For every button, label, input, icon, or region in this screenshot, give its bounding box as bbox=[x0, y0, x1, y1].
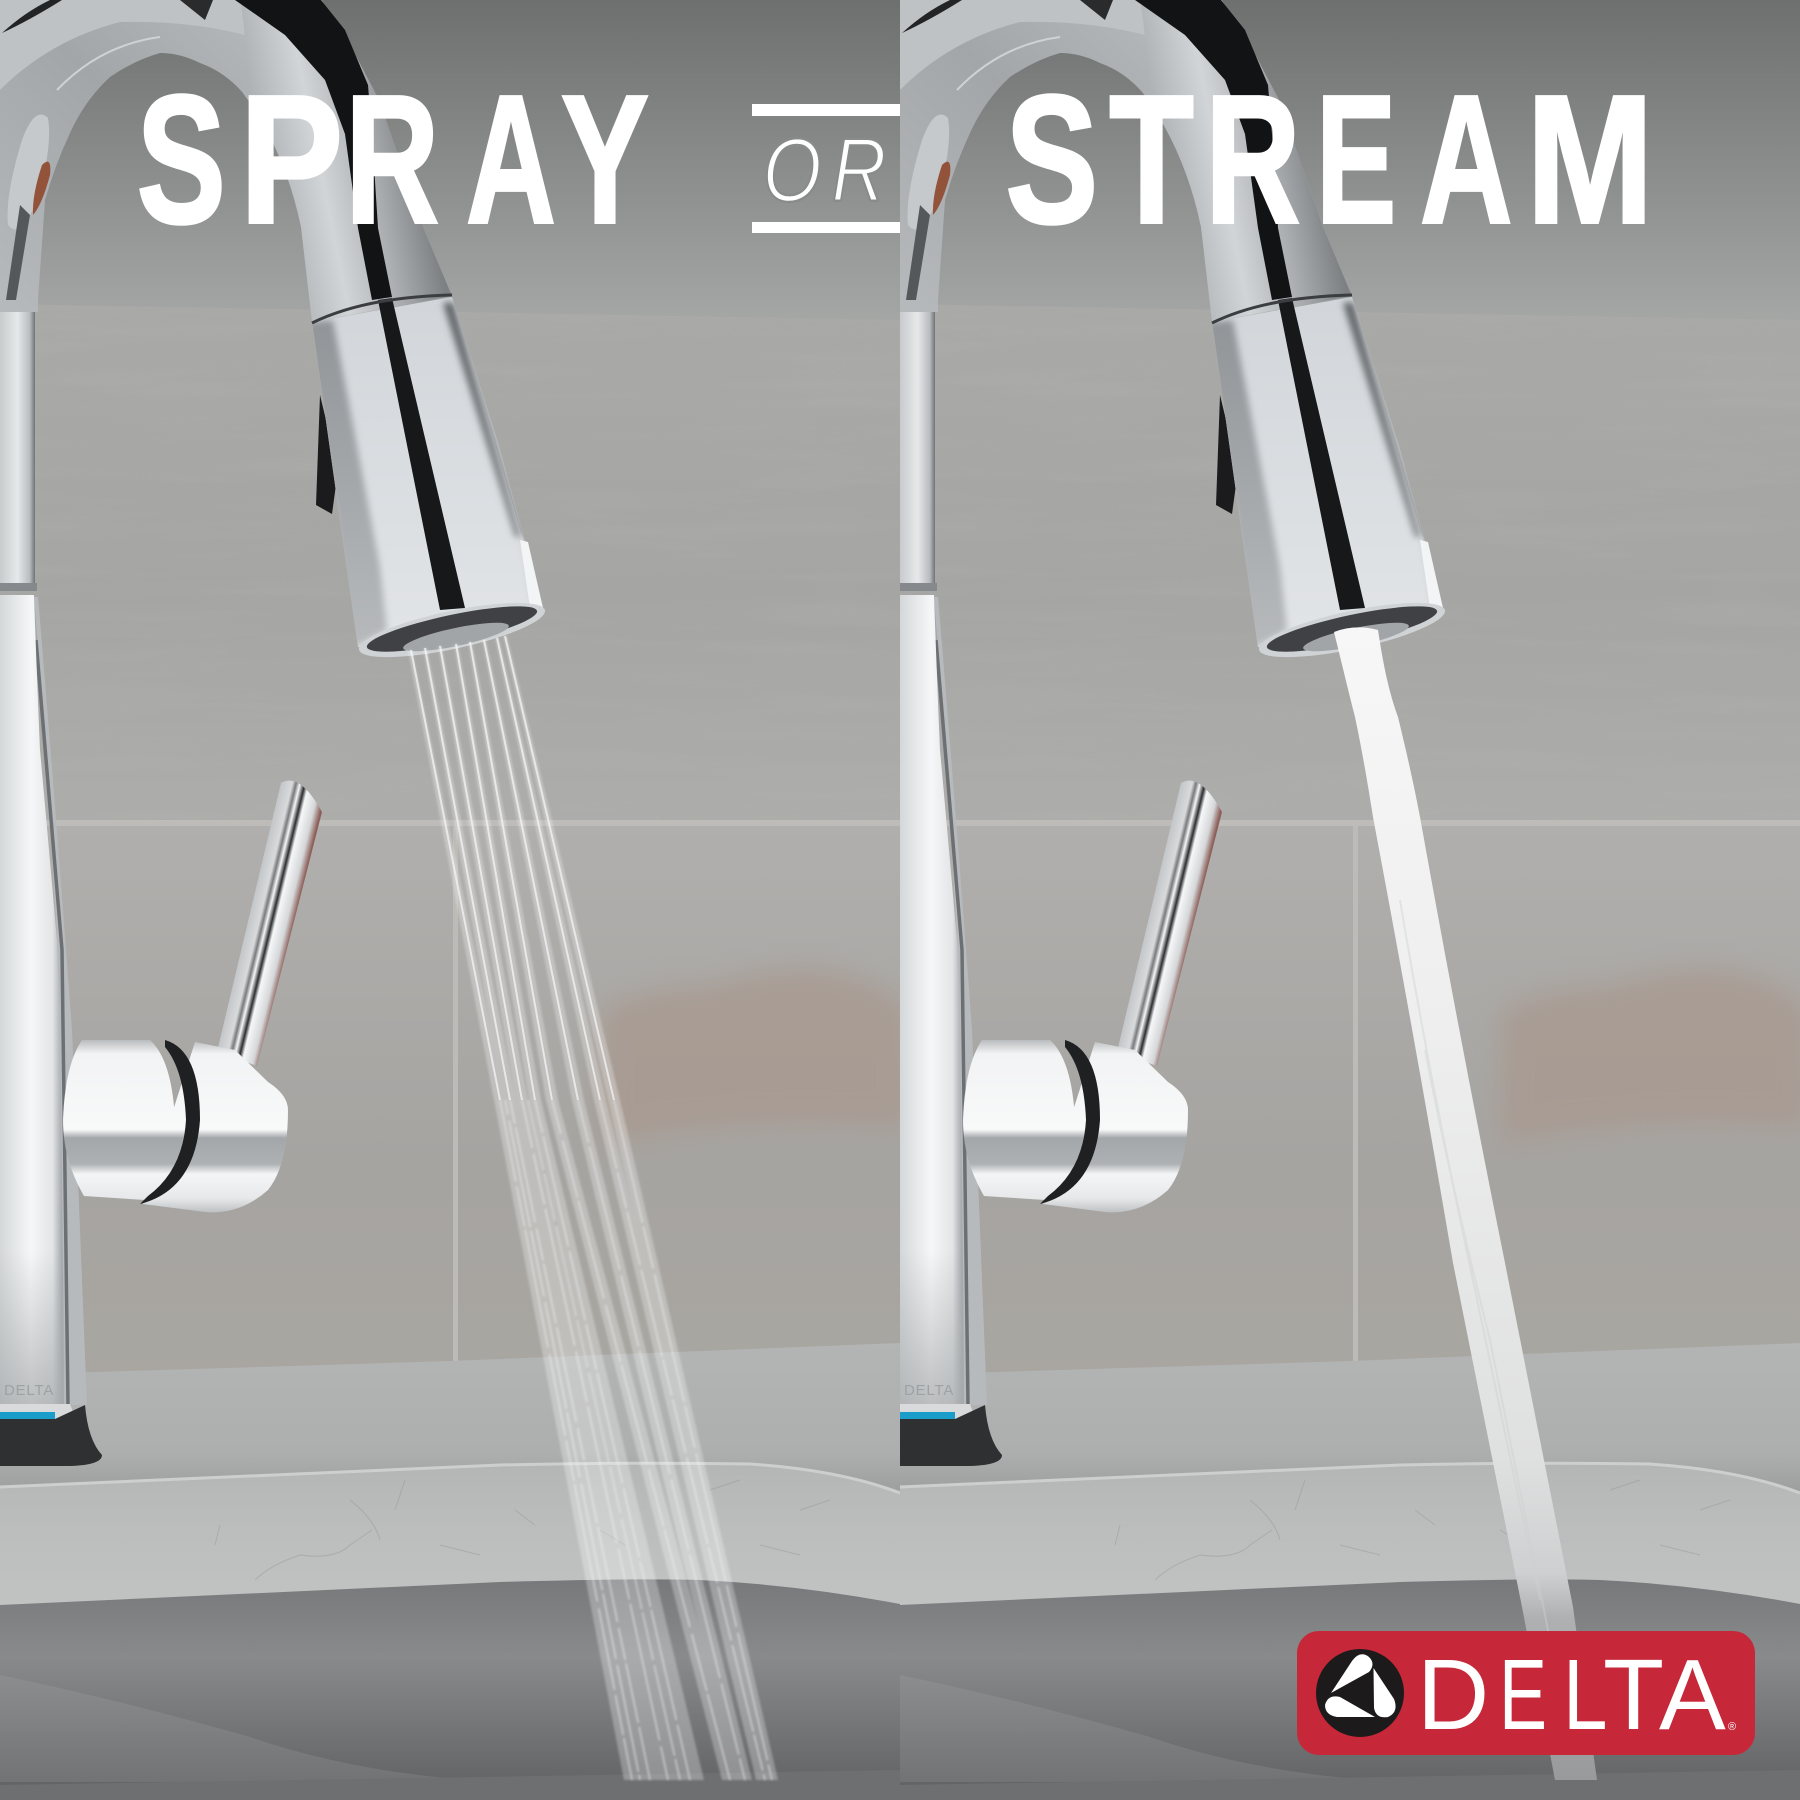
title: SPRAY: P bbox=[240, 57, 343, 261]
title: OR with rules: OR bbox=[763, 120, 886, 220]
title: STREAM: M bbox=[1526, 56, 1654, 262]
wordmark: DELTA: A bbox=[1659, 1639, 1726, 1751]
title: STREAM: E bbox=[1316, 57, 1396, 262]
wordmark: DELTA: L bbox=[1563, 1640, 1607, 1751]
wordmark: DELTA: T bbox=[1603, 1639, 1664, 1751]
water: solid stream bbox=[1334, 627, 1597, 1780]
title: SPRAY: S bbox=[137, 57, 226, 261]
wordmark: DELTA: ® bbox=[1728, 1721, 1736, 1733]
title: SPRAY: Y bbox=[561, 57, 649, 262]
title: SPRAY: R bbox=[345, 56, 439, 262]
title: STREAM bbox=[1005, 56, 1654, 262]
faucet: chrome pull-down kitchen faucet bbox=[900, 0, 1450, 1466]
faucet: chrome pull-down kitchen faucet bbox=[0, 0, 550, 1466]
title: SPRAY: A bbox=[466, 58, 556, 262]
title: SPRAY bbox=[137, 56, 649, 262]
background: kitchen wall and counter bbox=[0, 0, 910, 1800]
water: spray pattern bbox=[408, 636, 778, 1780]
title: STREAM: S bbox=[1005, 58, 1098, 262]
wordmark: DELTA: E bbox=[1499, 1639, 1547, 1751]
title: STREAM: R bbox=[1205, 57, 1300, 262]
title: OR with rules bbox=[752, 104, 900, 233]
panel: stream bbox=[900, 0, 1800, 1800]
title: STREAM: A bbox=[1420, 58, 1513, 262]
icon: Delta triangle mark bbox=[1316, 1649, 1404, 1737]
wordmark: DELTA bbox=[1417, 1639, 1736, 1751]
logo: Delta badge bbox=[1297, 1631, 1755, 1755]
title: STREAM: T bbox=[1109, 58, 1194, 262]
panel: spray bbox=[0, 0, 910, 1800]
wordmark: DELTA: D bbox=[1417, 1639, 1489, 1751]
background: kitchen wall and counter bbox=[900, 0, 1800, 1800]
